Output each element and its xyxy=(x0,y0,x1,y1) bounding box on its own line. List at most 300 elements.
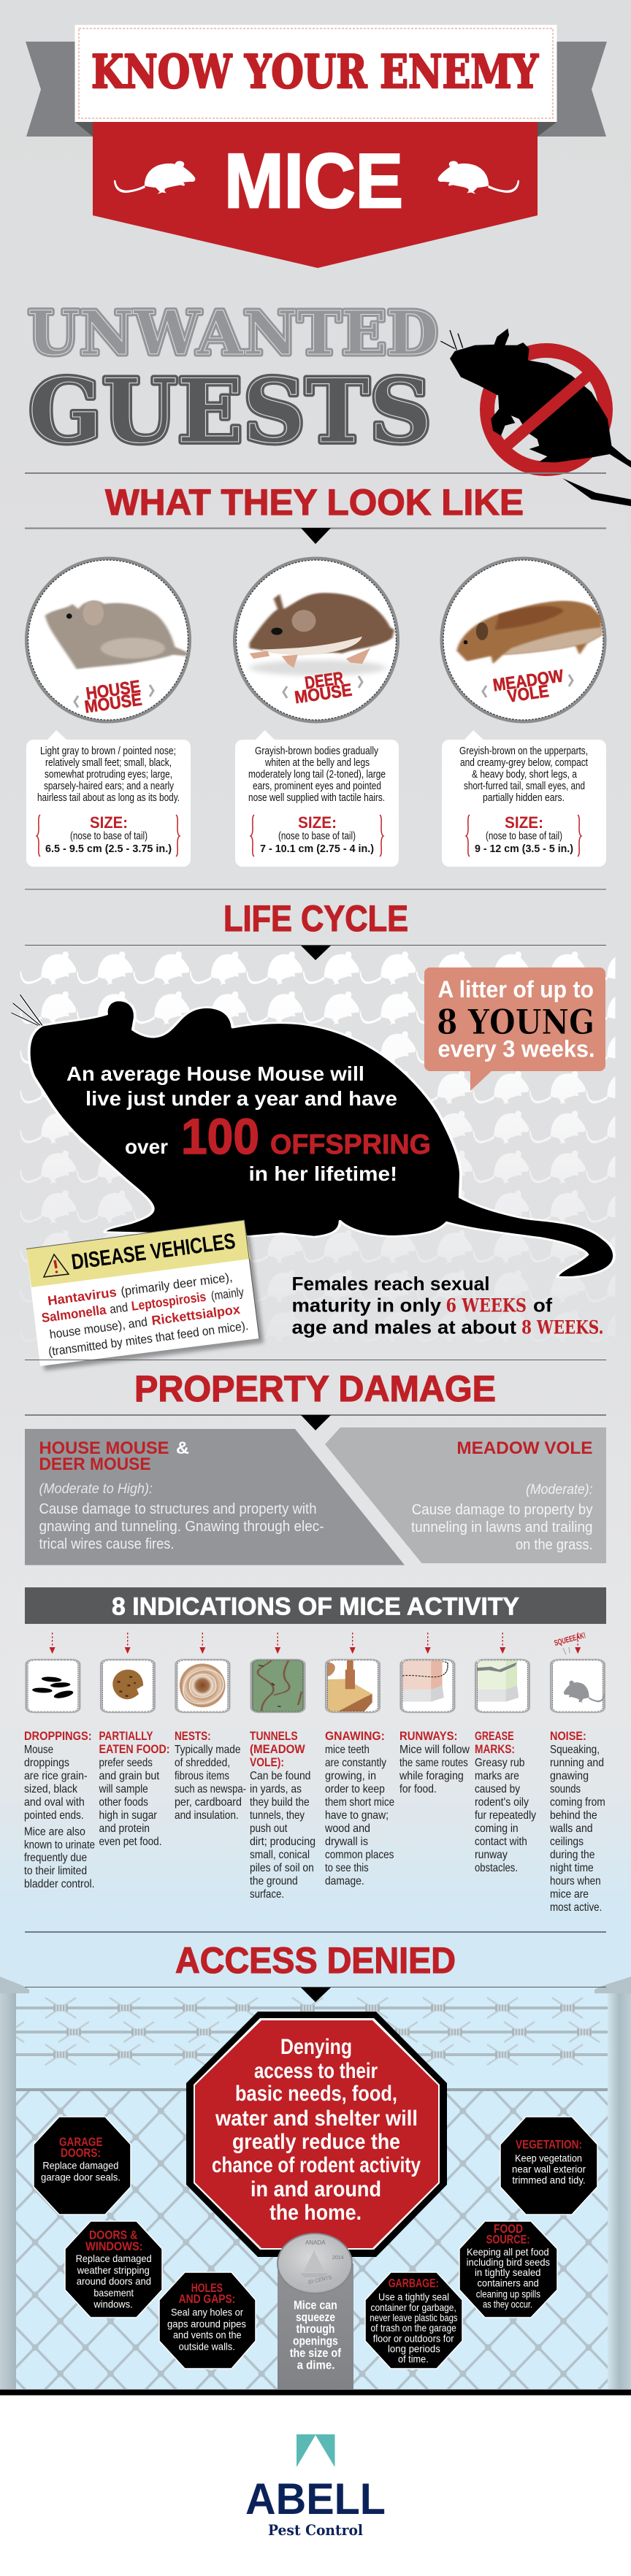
text: sexual maturity: 6 WEEKS xyxy=(445,1295,527,1316)
size xyxy=(466,813,581,856)
octagon: holes and gaps: outside walls. xyxy=(179,2341,235,2353)
text: grease marks: coming in xyxy=(475,1822,519,1835)
text: partially eaten food: high in sugar xyxy=(99,1809,157,1822)
icon: white mouse right xyxy=(438,161,519,194)
panel: house and deer mouse damage: (Moderate to High): xyxy=(39,1481,153,1497)
chain link xyxy=(0,2090,631,2390)
text: partially eaten food: even pet food. xyxy=(99,1836,162,1848)
octagon: garbage: GARBAGE: xyxy=(389,2277,439,2291)
description: short-furred tail, small eyes, and xyxy=(464,781,585,792)
panel: house and deer mouse damage: & xyxy=(176,1438,189,1458)
description: and creamy-grey below, compact xyxy=(460,757,588,769)
text: nests: NESTS: xyxy=(175,1729,211,1743)
text: noise: mice are xyxy=(550,1888,589,1901)
octagon: vegetation: Keep vegetation xyxy=(515,2153,582,2164)
heading: access denied: ACCESS DENIED xyxy=(175,1940,456,1981)
octagon: food source: cleaning up spills xyxy=(476,2288,540,2300)
label: mouse: MOUSE xyxy=(83,690,143,717)
octagon: doors and windows: Replace damaged xyxy=(76,2253,152,2264)
photo: meadow vole xyxy=(456,601,602,664)
octagon: food source xyxy=(459,2221,557,2318)
icon cards xyxy=(26,1660,605,1712)
divider xyxy=(25,1931,606,1933)
icon: warning triangle xyxy=(44,1254,69,1277)
white title plate xyxy=(74,25,557,122)
size: SIZE: xyxy=(298,813,337,832)
heading: unwanted guests: GUESTS xyxy=(28,360,432,463)
text: noise: walls and xyxy=(549,1822,593,1835)
line 3: house mouse), and xyxy=(49,1315,148,1341)
callout: litter size: 8 YOUNG xyxy=(437,1003,594,1043)
label: squeak xyxy=(554,1631,586,1655)
text: noise: Squeaking, xyxy=(550,1744,600,1756)
pointer xyxy=(301,1987,331,2002)
ribbon left xyxy=(26,42,93,137)
text: tunnels: small, conical xyxy=(250,1849,310,1861)
stop sign: main message: greatly reduce the xyxy=(232,2130,400,2154)
size: (nose to base of tail) xyxy=(70,831,148,843)
octagon: food source: in tightly sealed xyxy=(475,2266,540,2278)
text: runways: RUNWAYS: xyxy=(399,1729,457,1743)
heading: unwanted guests xyxy=(28,299,438,463)
text: mice can squeeze: a dime. xyxy=(297,2358,334,2372)
text: droppings: are rice grain- xyxy=(24,1770,88,1782)
text: noise: running and xyxy=(550,1757,604,1769)
text: gnawing: to see this xyxy=(325,1862,369,1874)
size: (nose to base of tail) xyxy=(486,831,562,843)
text: mice can squeeze: the size of xyxy=(290,2346,341,2360)
text: noise: night time xyxy=(550,1862,594,1874)
octagon: doors and windows: WINDOWS: xyxy=(85,2239,143,2253)
text: droppings: droppings xyxy=(24,1757,69,1769)
octagon: vegetation: trimmed and tidy. xyxy=(512,2174,586,2186)
octagon: garbage: Use a tightly seal xyxy=(378,2291,449,2303)
text: lifespan statement: in her lifetime! xyxy=(248,1162,397,1185)
text: noise: sounds xyxy=(550,1783,581,1795)
text: mice can squeeze: openings xyxy=(293,2334,338,2348)
text: lifespan statement xyxy=(66,1062,431,1185)
arrows: dotted red xyxy=(50,1633,581,1654)
text: noise: ceilings xyxy=(550,1836,584,1848)
divider xyxy=(25,1414,606,1416)
icon: grease marks xyxy=(475,1660,529,1712)
text: mice can squeeze: squeeze xyxy=(296,2310,335,2324)
text: tunnels: push out xyxy=(250,1822,288,1835)
octagon: holes and gaps: AND GAPS: xyxy=(179,2292,235,2306)
octagon: garbage: floor or outdoors for xyxy=(373,2333,454,2345)
octagon: garbage xyxy=(365,2272,462,2369)
text: nests: per, cardboard xyxy=(175,1796,242,1809)
text: gnawing: have to gnaw; xyxy=(325,1809,389,1822)
octagon: garbage: never leave plastic bags xyxy=(370,2312,457,2323)
description: Greyish-brown on the upperparts, xyxy=(459,745,588,757)
pointer xyxy=(301,528,331,544)
text: runways: Mice will follow xyxy=(399,1744,470,1756)
line 4: (transmitted by mites that feed on mice). xyxy=(47,1319,249,1359)
text: tunnels: they build the xyxy=(250,1796,310,1809)
text: nests: fibrous items xyxy=(175,1770,229,1782)
description: sparsely-haired ears; and a nearly xyxy=(44,781,175,792)
text: lifespan statement: live just under a year and have xyxy=(85,1087,397,1110)
card: house mouse xyxy=(26,730,191,867)
panel: house and deer mouse damage: gnawing and tunneling. Gnawing through elec- xyxy=(39,1519,324,1535)
octagon: garbage: of trash on the garage xyxy=(371,2322,456,2334)
text: droppings: Mouse xyxy=(24,1744,53,1756)
callout: litter size: every 3 weeks. xyxy=(438,1036,594,1062)
heading: property damage: PROPERTY DAMAGE xyxy=(134,1368,496,1409)
text: partially eaten food: and protein xyxy=(99,1822,150,1835)
icon: white mouse left xyxy=(114,161,195,194)
text: grease marks: obstacles. xyxy=(475,1862,518,1874)
line 2: (mainly xyxy=(210,1285,245,1303)
text: droppings: to their limited xyxy=(24,1865,87,1877)
icon: dime: 2014 xyxy=(332,2255,344,2261)
chevrons xyxy=(74,685,153,708)
text: runways: for food. xyxy=(399,1783,437,1795)
icon: nest xyxy=(176,1660,229,1712)
fence background xyxy=(0,1977,631,2390)
banner: 8 indications xyxy=(25,1587,606,1624)
icon: droppings xyxy=(26,1660,80,1712)
text: mice can squeeze: through xyxy=(297,2322,334,2336)
card: deer mouse xyxy=(235,730,399,867)
heading: unwanted guests: UNWANTED xyxy=(28,299,438,369)
divider xyxy=(25,527,606,529)
panel: meadow vole damage xyxy=(325,1427,606,1563)
description: & heavy body, short legs, a xyxy=(472,769,578,781)
octagon: doors and windows xyxy=(65,2221,162,2318)
size: SIZE: xyxy=(90,813,128,832)
panel: house mouse portrait xyxy=(26,558,190,721)
text: tunnels: in yards, as xyxy=(250,1783,302,1795)
text: grease marks: rodent's oily xyxy=(475,1796,529,1809)
ribbon fold right xyxy=(538,122,557,137)
line 2 xyxy=(41,1284,245,1325)
icon: gnawed chair xyxy=(326,1660,380,1712)
title: know your enemy: KNOW YOUR ENEMY xyxy=(91,45,539,99)
octagon: garbage: container for garbage, xyxy=(371,2301,456,2313)
octagon: holes and gaps: HOLES xyxy=(191,2281,223,2295)
text: sexual maturity: Females reach sexual xyxy=(292,1273,489,1295)
line 2: Salmonella xyxy=(41,1303,107,1325)
text: droppings: DROPPINGS: xyxy=(24,1729,92,1743)
pointer xyxy=(301,946,331,960)
text: gnawing: them short mice xyxy=(325,1796,394,1809)
label: mouse: MOUSE xyxy=(294,681,353,708)
text: gnawing: damage. xyxy=(325,1875,364,1887)
photo: deer mouse xyxy=(250,593,394,675)
text: droppings: frequently due xyxy=(24,1852,87,1864)
octagon: vegetation: near wall exterior xyxy=(512,2163,586,2175)
octagon: doors and windows: weather stripping xyxy=(77,2264,150,2276)
text: sexual maturity: 8 WEEKS. xyxy=(521,1317,603,1338)
text: gnawing: order to keep xyxy=(325,1783,385,1795)
icon: eaten cookie xyxy=(101,1660,155,1712)
text: mice can squeeze xyxy=(290,2299,341,2372)
text: partially eaten food: and grain but xyxy=(99,1770,160,1782)
barbed wire xyxy=(0,1998,631,2065)
size: 6.5 - 9.5 cm (2.5 - 3.75 in.) xyxy=(45,843,172,855)
text: grease marks: marks are xyxy=(475,1770,519,1782)
text: droppings xyxy=(24,1729,95,1890)
heading: what they look like: WHAT THEY LOOK LIKE xyxy=(105,482,524,523)
text: droppings: pointed ends. xyxy=(24,1809,84,1822)
text: partially eaten food: PARTIALLY xyxy=(99,1729,153,1743)
logo: abell pest control: ABELL xyxy=(245,2475,386,2523)
stop sign: main message: access to their xyxy=(254,2059,378,2083)
chevrons xyxy=(483,675,573,697)
line 2: Leptospirosis xyxy=(131,1289,207,1314)
description xyxy=(459,745,588,804)
text: lifespan statement: An average House Mouse will xyxy=(66,1062,364,1085)
text: partially eaten food: prefer seeds xyxy=(99,1757,153,1769)
octagon: garbage: long periods xyxy=(388,2343,440,2355)
title: mice: MICE xyxy=(224,138,403,224)
icon: tunnels xyxy=(251,1660,305,1712)
text: tunnels: dirt; producing xyxy=(250,1836,316,1848)
size: (nose to base of tail) xyxy=(278,831,356,843)
text: noise: hours when xyxy=(550,1875,601,1887)
description: somewhat protruding eyes; large, xyxy=(45,769,172,781)
logo: abell pest control xyxy=(245,2434,386,2539)
text: nests: Typically made xyxy=(175,1744,241,1756)
icon: dime: ANADA xyxy=(305,2239,326,2246)
heading: life cycle: LIFE CYCLE xyxy=(223,898,408,939)
pointer xyxy=(301,1415,331,1430)
photo: house mouse xyxy=(45,600,187,669)
text: droppings: sized, black xyxy=(24,1783,78,1795)
description: ears, prominent eyes and pointed xyxy=(253,781,381,792)
text: gnawing: GNAWING: xyxy=(325,1729,385,1743)
callout: litter size: A litter of up to xyxy=(438,976,594,1003)
octagon: doors and windows: basement xyxy=(93,2287,134,2299)
octagon: holes and gaps xyxy=(159,2272,256,2369)
card title: DISEASE VEHICLES xyxy=(70,1229,237,1275)
text: noise: most active. xyxy=(550,1901,602,1914)
text: runways: the same routes xyxy=(399,1757,468,1769)
ribbon folds xyxy=(74,122,93,137)
panel: deer mouse portrait xyxy=(234,558,398,721)
octagon: vegetation xyxy=(500,2117,597,2215)
text: mice can squeeze: Mice can xyxy=(294,2299,337,2312)
panel: meadow vole portrait xyxy=(441,558,605,721)
text: grease marks: GREASE xyxy=(475,1729,514,1743)
octagon: holes and gaps: Seal any holes or xyxy=(171,2307,243,2318)
octagon: food source: SOURCE: xyxy=(486,2233,530,2247)
text: sexual maturity: age and males at about xyxy=(292,1316,516,1338)
text: noise xyxy=(549,1729,605,1914)
panel: meadow vole damage: Cause damage to property by xyxy=(412,1502,593,1518)
text: gnawing: are constantly xyxy=(325,1757,386,1769)
text: droppings: Mice are also xyxy=(24,1825,85,1838)
octagon: food source: Keeping all pet food xyxy=(467,2246,549,2258)
stop sign: main message: in and around xyxy=(251,2177,381,2201)
divider xyxy=(25,472,606,474)
size: SIZE: xyxy=(505,813,543,832)
text: grease marks: caused by xyxy=(475,1783,520,1795)
text: droppings: bladder control. xyxy=(24,1878,95,1890)
text: noise: during the xyxy=(550,1849,594,1861)
text: noise: gnawing xyxy=(550,1770,589,1782)
description: Grayish-brown bodies gradually xyxy=(255,745,379,757)
text: tunnels: VOLE): xyxy=(250,1755,284,1769)
label: meadow: MEADOW xyxy=(492,666,565,696)
octagon: garage doors xyxy=(34,2117,131,2215)
text: runways xyxy=(399,1729,470,1795)
text: tunnels xyxy=(250,1729,316,1901)
text: tunnels: surface. xyxy=(250,1888,284,1901)
label: vole: VOLE xyxy=(506,681,550,707)
description: whiten at the belly and legs xyxy=(264,757,370,769)
panel: meadow vole damage: MEADOW VOLE xyxy=(456,1438,592,1458)
octagon: vegetation: VEGETATION: xyxy=(516,2138,582,2152)
line 3 xyxy=(49,1302,241,1341)
description xyxy=(248,745,386,804)
size: 7 - 10.1 cm (2.75 - 4 in.) xyxy=(260,843,374,855)
text: gnawing: wood and xyxy=(324,1822,370,1835)
octagon: garage doors: garage door seals. xyxy=(41,2171,121,2183)
header banner xyxy=(26,25,607,268)
logo: abell pest control: Pest Control xyxy=(268,2521,363,2539)
line 1 xyxy=(47,1270,233,1308)
panel: meadow vole damage: on the grass. xyxy=(516,1537,593,1553)
size: 9 - 12 cm (3.5 - 5 in.) xyxy=(475,843,573,855)
text: noise: NOISE: xyxy=(550,1729,586,1743)
text: noise: behind the xyxy=(550,1809,597,1822)
panel: house and deer mouse damage xyxy=(25,1429,405,1565)
big black mouse silhouette xyxy=(11,994,614,1277)
text: gnawing: growing, in xyxy=(325,1770,376,1782)
icon: runway wall xyxy=(401,1660,454,1712)
panel: house and deer mouse damage: HOUSE MOUSE xyxy=(39,1438,169,1458)
text: sexual maturity: of xyxy=(533,1295,552,1316)
text: nests: and insulation. xyxy=(175,1809,239,1822)
card: disease vehicles xyxy=(26,1220,264,1371)
text: lifespan statement: 100 xyxy=(181,1108,259,1165)
description: Light gray to brown / pointed nose; xyxy=(40,745,176,757)
dime column xyxy=(278,2263,353,2390)
text: grease marks xyxy=(475,1729,536,1874)
description: relatively small feet; small, black, xyxy=(45,757,172,769)
description: partially hidden ears. xyxy=(483,792,565,804)
line 1: Hantavirus xyxy=(47,1284,118,1308)
octagon: doors and windows: windows. xyxy=(93,2299,133,2310)
panel: house and deer mouse damage: trical wires cause fires. xyxy=(39,1536,174,1552)
octagon: holes and gaps: and vents on the xyxy=(173,2329,242,2341)
text: grease marks: contact with xyxy=(475,1836,527,1848)
text: grease marks: Greasy rub xyxy=(475,1757,525,1769)
red pennant xyxy=(93,122,538,268)
fence post right xyxy=(594,1977,631,2390)
octagon: doors and windows: around doors and xyxy=(77,2275,151,2287)
size xyxy=(251,813,383,856)
text: grease marks: MARKS: xyxy=(475,1742,515,1756)
text: tunnels: TUNNELS xyxy=(250,1729,298,1743)
panel: meadow vole damage: tunneling in lawns and trailing xyxy=(411,1519,593,1536)
panel: meadow vole damage: (Moderate): xyxy=(526,1482,593,1498)
stop sign: main message: basic needs, food, xyxy=(235,2082,397,2106)
stop sign: main message: the home. xyxy=(269,2201,362,2225)
text: grease marks: fur repeatedly xyxy=(475,1809,536,1822)
dashed plate border xyxy=(79,28,553,118)
octagon: garbage: of time. xyxy=(398,2353,429,2365)
octagon: holes and gaps: gaps around pipes xyxy=(167,2318,246,2330)
top rail xyxy=(0,2088,631,2091)
description: moderately long tail (2-toned), large xyxy=(248,769,386,781)
text: runways: while foraging xyxy=(399,1770,464,1782)
icon: dime: 10 CENTS xyxy=(307,2275,332,2285)
text: partially eaten food xyxy=(99,1729,169,1848)
icon: dime xyxy=(278,2234,352,2293)
text: tunnels: piles of soil on xyxy=(250,1862,314,1874)
card: meadow vole xyxy=(442,730,606,867)
line 2: and xyxy=(109,1300,129,1316)
icon: grey mouse xyxy=(551,1660,605,1712)
octagon: garage doors: Replace damaged xyxy=(42,2160,118,2171)
text: gnawing: drywall is xyxy=(325,1836,368,1848)
footer bar xyxy=(0,2389,631,2396)
label: deer: DEER xyxy=(304,668,345,694)
heading: unwanted guests: UNWANTED xyxy=(28,299,438,369)
label: squeak: SQUEEEAK! xyxy=(554,1631,586,1648)
footer background xyxy=(0,2396,631,2576)
octagon: food source: containers and xyxy=(478,2277,539,2289)
text: noise: coming from xyxy=(550,1796,605,1809)
text: sexual maturity xyxy=(292,1273,603,1338)
background pattern: white mice xyxy=(20,951,615,1288)
text: partially eaten food: will sample xyxy=(99,1783,148,1795)
line 3: Rickettsialpox xyxy=(150,1302,241,1328)
octagon: food source: including bird seeds xyxy=(467,2256,550,2268)
stop sign: main message xyxy=(186,2012,447,2257)
text: partially eaten food: other foods xyxy=(99,1796,148,1809)
text: tunnels: (MEADOW xyxy=(250,1742,306,1756)
text: lifespan statement: OFFSPRING xyxy=(270,1130,431,1160)
text: partially eaten food: EATEN FOOD: xyxy=(99,1742,169,1756)
divider xyxy=(25,889,606,890)
description xyxy=(37,745,180,804)
panel: house and deer mouse damage: DEER MOUSE xyxy=(39,1454,150,1474)
text: tunnels: Can be found xyxy=(250,1770,310,1782)
callout: litter size xyxy=(424,967,605,1091)
banner: 8 indications: 8 INDICATIONS OF MICE ACTIVITY xyxy=(112,1593,519,1621)
text: tunnels: the ground xyxy=(250,1875,298,1887)
octagon: food source: as they occur. xyxy=(483,2299,532,2310)
description: hairless tail about as long as its body. xyxy=(37,792,180,804)
heading: unwanted guests: GUESTS xyxy=(28,360,432,463)
label: house: HOUSE xyxy=(85,677,142,704)
text: sexual maturity: maturity in only xyxy=(292,1295,442,1316)
text: grease marks: runway xyxy=(475,1849,508,1861)
octagon: food source: FOOD xyxy=(494,2222,523,2236)
line 1: (primarily deer mice), xyxy=(120,1270,233,1298)
text: gnawing xyxy=(324,1729,394,1887)
stop sign: main message: Denying xyxy=(280,2035,352,2059)
callout: litter size: 8 YOUNG xyxy=(437,1003,594,1043)
octagon: doors and windows: DOORS & xyxy=(89,2228,137,2242)
text: lifespan statement: over xyxy=(125,1135,168,1158)
text: droppings: known to urinate xyxy=(24,1839,95,1852)
divider xyxy=(25,945,606,946)
text: nests: of shredded, xyxy=(175,1757,230,1769)
text: gnawing: common places xyxy=(325,1849,394,1861)
stop sign: main message: chance of rodent activity xyxy=(212,2153,421,2177)
panel: house and deer mouse damage: Cause damage to structures and property with xyxy=(39,1501,317,1517)
size xyxy=(37,813,180,856)
text: nests xyxy=(175,1729,246,1822)
fence post left xyxy=(0,1977,29,2390)
text: nests: such as newspa- xyxy=(175,1783,246,1795)
